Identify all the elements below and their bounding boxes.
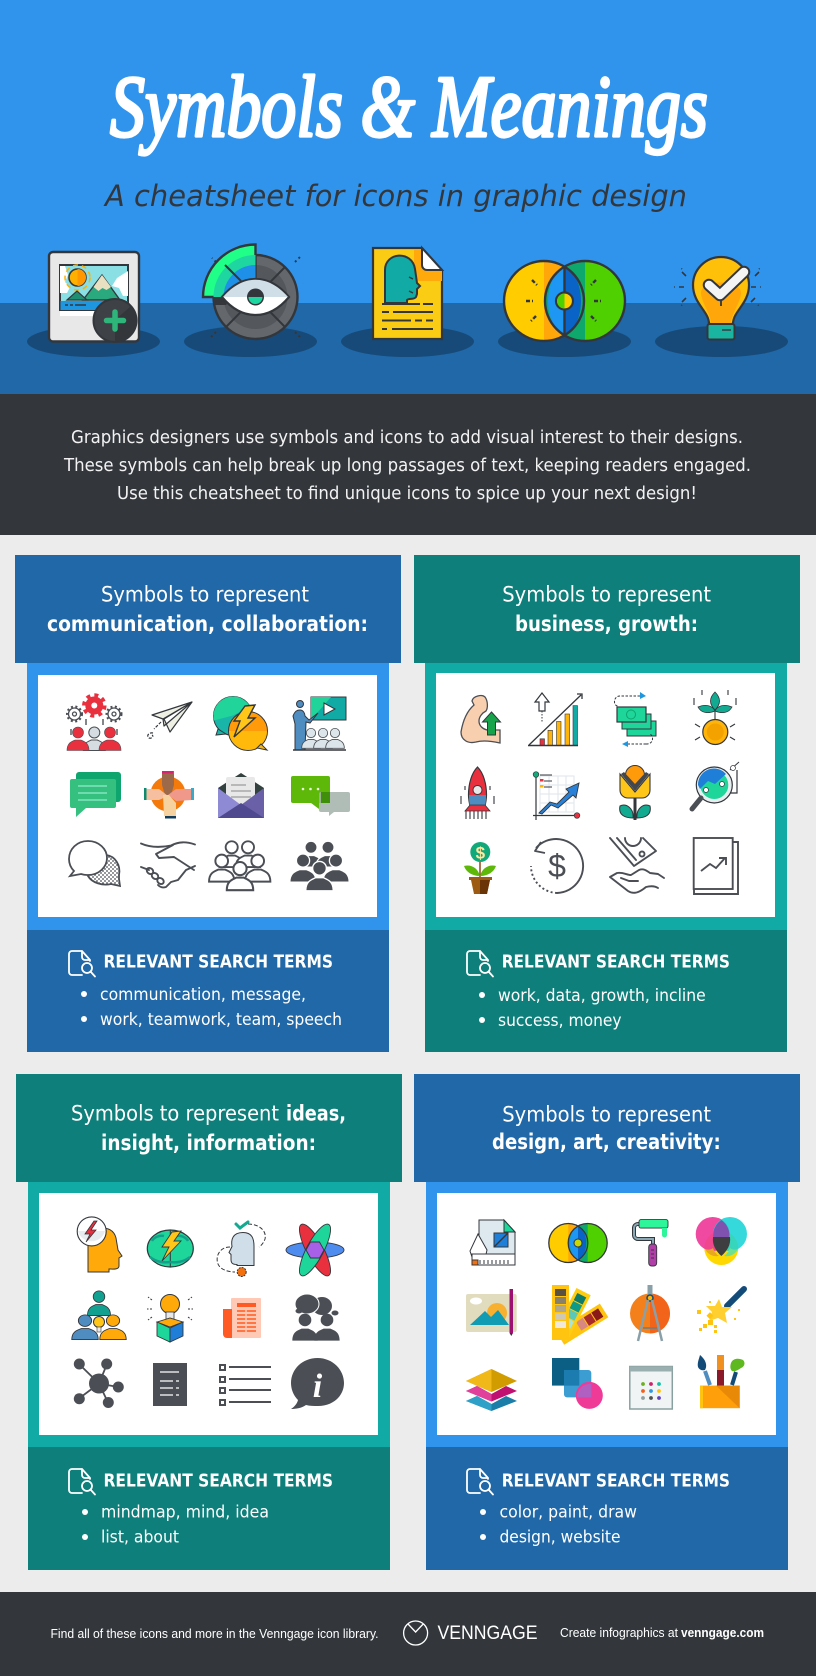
panel heading: design: Symbols to represent [502,1103,711,1127]
search terms: design: color, paint, draw [500,1503,637,1522]
icon: color swatches [552,1285,608,1345]
hero icon: venn diagram [498,261,631,357]
icon: overlapping squares [552,1358,603,1409]
search terms: design: design, website [500,1528,620,1547]
icon: outline group [209,841,270,890]
icon: circular dollar arrow: $ [548,848,566,884]
intro text: Graphics designers use symbols and icons to add visual interest to their designs. [71,428,743,448]
hero icon: light bulb with check [655,257,788,357]
icon: info bubble [291,1358,344,1409]
panel heading: ideas: Symbols to represent [71,1102,279,1126]
search terms: communication: communication, message, [100,985,306,1004]
search terms: design [426,1447,788,1570]
header band [0,0,816,394]
panel heading: ideas: ideas, [286,1102,346,1126]
icon box: communication [38,675,377,917]
intro text [63,428,751,504]
panel heading: design [414,1074,800,1182]
icon: layers [466,1369,517,1411]
search terms: communication: work, teamwork, team, speech [100,1010,342,1029]
icon: venn small [549,1224,607,1262]
icon: chat squares [291,776,350,816]
search terms: business [425,930,787,1052]
icon: head with lightning bubble [77,1217,122,1272]
icon: dollar plant pot: $ [476,844,486,862]
icon: compass over circle [630,1285,670,1341]
search terms: ideas [28,1447,390,1570]
icon: paint roller [634,1220,668,1266]
icon: open envelope [218,773,264,818]
icon: atom [286,1220,344,1280]
icon: magic wand star [697,1289,744,1333]
intro panel [0,394,816,535]
panel heading: design: design, art, creativity: [492,1130,721,1154]
icon: paint brushes in cup [698,1355,744,1408]
icon: green chat [70,772,121,817]
icon: flexed arm with arrow [461,696,500,743]
panel heading: business: Symbols to represent [502,583,711,607]
icon: rocket [461,767,494,819]
footer [0,1592,816,1676]
icon: search document [467,951,493,976]
icon: gears and people [67,695,122,750]
icon: text document [153,1363,187,1406]
footer text: icon library: Find all of these icons and more in the Venngage icon library. [50,1627,378,1641]
search terms: communication: RELEVANT SEARCH TERMS [104,952,333,972]
hero icon: picture with plus [27,252,160,357]
icon: checklist [220,1365,271,1405]
logo: Venngage: VENNGAGE [438,1623,538,1644]
panel heading: communication: communication, collaboration: [47,612,368,636]
icon: outline speech bubbles [69,841,120,886]
icon: rising chart [533,772,580,820]
icon: pen tool document [470,1220,515,1265]
subtitle: A cheatsheet for icons in graphic design [103,179,687,213]
icon: search document [69,951,95,976]
icon: growth bars [528,693,582,746]
icon: head with cycle [217,1222,265,1276]
icon: landscape picture with pencil [466,1289,517,1336]
hero icon: head document [341,248,474,357]
icon box: ideas [39,1193,378,1435]
footer text: create infographics: venngage.com [681,1626,764,1640]
icon: money transfer [614,692,656,747]
icon: overlapping color circles [696,1217,747,1265]
panel: design, art, creativity [414,1074,800,1570]
icon: handshake [141,842,195,887]
icon: search document [467,1469,493,1494]
search terms: communication [27,930,389,1052]
icon: two people talking [292,1294,340,1341]
intro text: Use this cheatsheet to find unique icons to spice up your next design! [117,484,697,504]
icon box: design [437,1193,776,1435]
search terms: ideas: list, about [101,1528,179,1547]
icon: box with bulb [147,1294,193,1342]
icon box: business [436,673,775,917]
panel heading: business [414,555,800,663]
intro text: These symbols can help break up long passages of text, keeping readers engaged. [63,456,751,476]
icon: magnifier with graph [692,762,739,809]
icon: filled group [290,841,349,891]
panel heading: business: business, growth: [515,612,698,636]
icon: people with idea [72,1291,126,1340]
icon: presenter with audience [293,697,346,750]
icon: network [74,1358,124,1408]
icon: info bubble: i [313,1368,323,1405]
panel heading: ideas [16,1074,402,1182]
search terms: business: success, money [498,1011,622,1030]
icon: speech bubbles with lightning [213,696,268,750]
search terms: ideas: RELEVANT SEARCH TERMS [104,1471,333,1491]
icon: search document [69,1469,95,1494]
footer text: create infographics [560,1626,764,1640]
icon: circular dollar arrow [531,839,583,893]
logo: Venngage [404,1621,538,1645]
icon: newspaper [223,1298,261,1338]
panel heading: communication [15,555,401,663]
footer text: create infographics: Create infographics at [560,1626,679,1640]
search terms: business: work, data, growth, incline [498,986,706,1005]
icon: dollar plant pot [464,842,496,894]
icon: plant with coin [694,690,736,744]
panel heading: ideas: insight, information: [101,1131,316,1155]
icon: hand with money [610,838,664,893]
icon: browser window [630,1366,672,1409]
icon: four hands [144,771,194,818]
panel: ideas, insight, information [16,1074,402,1570]
icon: document with chart [694,838,738,894]
panel: business, growth [414,555,800,1052]
search terms: ideas: mindmap, mind, idea [101,1503,269,1522]
icon: paper plane [148,702,192,738]
hero icon: eye radar [184,244,317,357]
search terms: design: RELEVANT SEARCH TERMS [502,1471,730,1491]
panel: communication, collaboration [15,555,401,1052]
search terms: business: RELEVANT SEARCH TERMS [502,952,730,972]
panel heading: communication: Symbols to represent [101,583,309,607]
icon: coin flower [620,766,650,820]
icon: brain with lightning [147,1230,193,1267]
